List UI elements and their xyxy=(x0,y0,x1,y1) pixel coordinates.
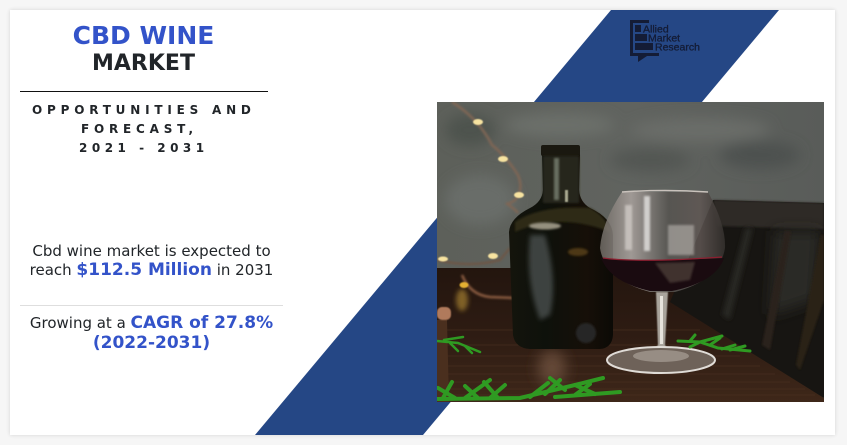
subtitle: opportunities and forecast xyxy=(32,103,256,155)
wall backdrop xyxy=(437,102,824,277)
photo: wine bottle and glass on wooden table xyxy=(437,102,824,402)
blue diagonal parallelogram xyxy=(255,10,779,435)
wine xyxy=(601,258,724,291)
wood grain xyxy=(447,330,815,395)
table top xyxy=(437,268,824,402)
wood reflection xyxy=(538,350,566,386)
subtitle: opportunities and forecast: OPPORTUNITIES AND xyxy=(32,103,256,117)
CAGR statement: Growing at a CAGR of 27.8% xyxy=(30,313,273,333)
chair xyxy=(670,200,824,398)
logo icon xyxy=(630,20,659,62)
table front edge and post xyxy=(437,320,449,402)
string lights xyxy=(437,102,524,298)
logo wordmark xyxy=(643,24,700,54)
heading divider rule xyxy=(20,91,268,92)
green foliage sprigs xyxy=(437,335,750,399)
logo wordmark: Research xyxy=(655,42,700,54)
section divider xyxy=(20,305,283,306)
subtitle: opportunities and forecast: FORECAST, xyxy=(81,122,198,136)
title xyxy=(73,21,214,76)
market size statement: Cbd wine market is expected to xyxy=(32,242,271,260)
title line: MARKET: MARKET xyxy=(92,51,195,76)
title line: CBD WINE: CBD WINE xyxy=(73,21,214,50)
wine glass xyxy=(600,190,725,373)
logo: Allied Market Research xyxy=(630,20,700,62)
foot xyxy=(607,347,715,373)
market size statement xyxy=(30,242,273,280)
market size statement: reach $112.5 Million in 2031 xyxy=(30,260,273,280)
logo wordmark: Allied xyxy=(643,24,669,36)
subtitle: opportunities and forecast: 2021 - 2031 xyxy=(79,141,209,155)
blue diagonal band, logo and wine photograph xyxy=(255,10,824,435)
CAGR statement xyxy=(30,313,273,353)
wine bottle xyxy=(509,145,613,349)
CAGR statement: (2022-2031) xyxy=(93,333,210,353)
stem xyxy=(655,292,669,346)
logo wordmark: Market xyxy=(648,32,680,44)
